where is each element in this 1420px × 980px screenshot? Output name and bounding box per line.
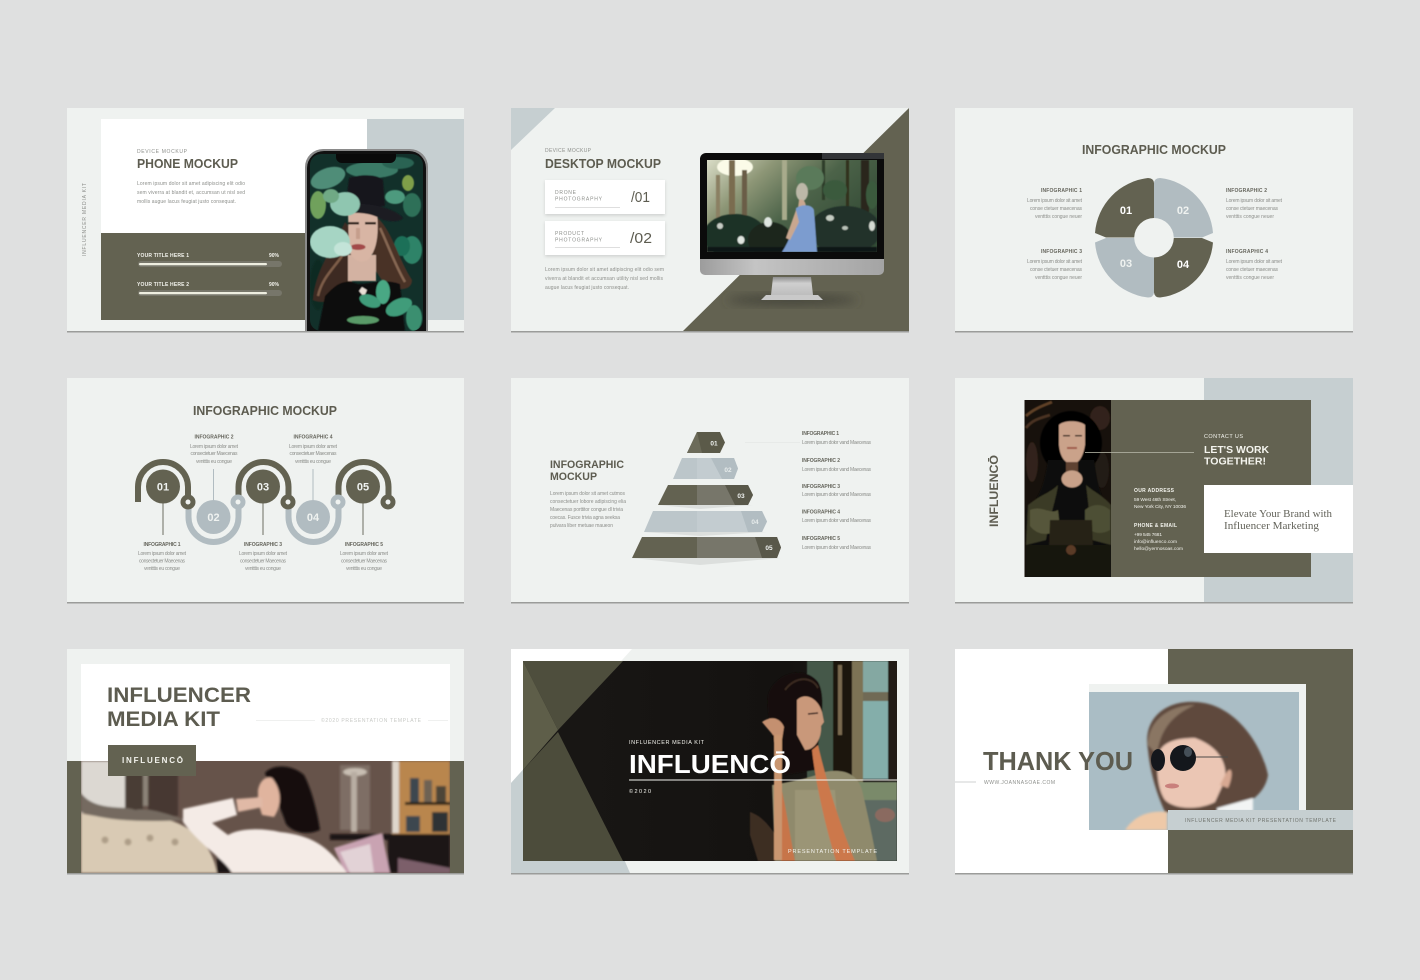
paragraph: Lorem ipsum dolor sit amet adipiscing elit odio sem <box>545 267 664 273</box>
face <box>797 696 824 750</box>
contact heading: CONTACT US <box>1204 434 1243 440</box>
heading: MOCKUP <box>550 471 597 483</box>
connector lines <box>162 469 364 535</box>
contact heading: LET'S WORK <box>1204 445 1270 456</box>
heading: PHONE MOCKUP <box>137 157 238 171</box>
heading: DESKTOP MOCKUP <box>545 157 661 171</box>
face <box>348 212 378 262</box>
paragraph <box>550 491 626 529</box>
list item 4: Lorem ipsum dolor vand Maecenas <box>802 518 872 524</box>
white panel <box>81 664 450 761</box>
photo: woman on sofa <box>81 761 450 873</box>
white callout <box>1204 485 1353 553</box>
front leaves <box>310 226 350 258</box>
hair <box>265 766 320 833</box>
paragraph <box>545 267 664 291</box>
panel: infographic donut slide <box>955 108 1353 332</box>
label 1 <box>138 542 187 572</box>
label 2 <box>1226 188 1283 220</box>
progress bar 1 <box>137 253 282 267</box>
paragraph: sem viverra at blandit et, accumsan ut nisl sed <box>137 190 245 196</box>
label 5: Lorem ipsum dolor amet <box>340 551 389 557</box>
progress bar 2: YOUR TITLE HERE 2 <box>137 282 189 288</box>
tier 04: 04 <box>751 519 759 526</box>
label 1: consectetuer Maecenas <box>139 558 186 564</box>
photo: woman in hat <box>1024 400 1111 577</box>
label 1: ventttis eu congue <box>144 566 180 572</box>
label 1: ventttis congue neuer <box>1035 214 1082 220</box>
grey arcs <box>188 502 338 542</box>
tier 01 <box>687 432 725 453</box>
donut chart: 02 <box>1177 205 1189 217</box>
paragraph: augue lacus feugiat justo consequat. <box>545 285 629 291</box>
label 1: Lorem ipsum dolor sit amet <box>1027 198 1083 204</box>
card 02: PHOTOGRAPHY <box>555 238 603 244</box>
light frame <box>1089 684 1306 810</box>
vertical label: INFLUENCER MEDIA KIT <box>82 183 88 256</box>
progress bar 2 <box>137 282 282 296</box>
brand badge: INFLUENCŌ <box>122 756 183 765</box>
list item 4: INFOGRAPHIC 4 <box>802 510 840 516</box>
orange hair <box>780 792 796 861</box>
label 1: conse ctetuer maecenas <box>1030 206 1082 212</box>
tier 05 <box>632 537 781 558</box>
list item 1: INFOGRAPHIC 1 <box>802 431 839 437</box>
panel: thank you slide <box>955 649 1353 874</box>
tier 03: 03 <box>737 493 745 500</box>
photo: woman with sunglasses <box>1089 692 1299 830</box>
step circles: 05 <box>357 482 369 494</box>
address: 59 West 46th Street, <box>1134 497 1176 503</box>
donut chart: 03 <box>1120 258 1132 270</box>
face and arm <box>258 778 280 817</box>
panel: phone mockup slide <box>67 108 464 332</box>
white callout: Influencer Marketing <box>1224 521 1320 532</box>
phone photo: woman among leaves <box>308 154 423 331</box>
list item 1 <box>802 431 872 446</box>
olive block <box>1111 400 1311 577</box>
panel: dark title slide <box>511 649 909 874</box>
heading: INFOGRAPHIC <box>550 459 624 471</box>
tier 01: 01 <box>710 440 718 448</box>
card 01: DRONE <box>555 190 577 196</box>
olive block <box>101 233 311 320</box>
label 1: Lorem ipsum dolor amet <box>138 551 187 557</box>
list item 3: INFOGRAPHIC 3 <box>802 484 840 490</box>
list item 2: Lorem ipsum dolor vand Maecenas <box>802 467 872 473</box>
title: INFLUENCŌ <box>629 749 791 779</box>
label 4: Lorem ipsum dolor amet <box>289 444 338 450</box>
label 4: ventttis congue neuer <box>1226 275 1274 281</box>
phone mockup <box>305 149 428 331</box>
woman figure <box>796 183 808 201</box>
list item 3: Lorem ipsum dolor vand Maecenas <box>802 492 872 498</box>
photo frame <box>523 661 897 861</box>
tier 04 <box>644 511 767 532</box>
step circles: 03 <box>257 482 269 494</box>
label 4: conse ctetuer maecenas <box>1226 267 1278 273</box>
grey corner <box>511 108 555 150</box>
label 3 <box>1027 249 1083 281</box>
card 02: PRODUCT <box>555 231 584 237</box>
phone notch <box>336 154 396 163</box>
label 1 <box>1027 188 1083 220</box>
paragraph: viverra at blandit et accumsan utility nisl sed mollis <box>545 276 664 282</box>
panel: infographic timeline slide <box>67 378 464 604</box>
list item 1: Lorem ipsum dolor vand Maecenas <box>802 440 872 446</box>
card 02 <box>545 221 665 255</box>
heading: MEDIA KIT <box>107 708 220 731</box>
list item 5 <box>802 536 872 551</box>
label 2: Lorem ipsum dolor sit amet <box>1226 198 1283 204</box>
card 01: /01 <box>631 190 650 206</box>
year: ©2020 <box>629 788 651 795</box>
paragraph: Maecenas porttitor congue dl trivia <box>550 507 623 513</box>
donut chart: 04 <box>1177 259 1190 271</box>
paragraph: consectetuer lobore adipiscing elia <box>550 499 626 505</box>
progress bar 2: 90% <box>269 282 280 288</box>
label 2: conse ctetuer maecenas <box>1226 206 1278 212</box>
heading: INFOGRAPHIC MOCKUP <box>193 404 337 418</box>
olive arcs <box>138 462 388 502</box>
olive diagonal <box>683 108 909 331</box>
white content block <box>101 119 367 233</box>
label 2 <box>190 434 239 465</box>
phone and email: PHONE & EMAIL <box>1134 523 1177 529</box>
neck and top <box>348 255 376 281</box>
caption strip: INFLUENCER MEDIA KIT PRESENTATION TEMPLATE <box>1185 818 1337 824</box>
label 3: ventttis eu congue <box>245 566 281 572</box>
label 1: INFOGRAPHIC 1 <box>144 542 181 548</box>
label 4: consectetuer Maecenas <box>290 451 337 457</box>
hair <box>768 673 822 775</box>
phone and email: info@influenco.com <box>1134 539 1177 545</box>
sofa <box>81 813 217 873</box>
olive block <box>1168 649 1353 873</box>
paragraph <box>137 181 245 205</box>
eyebrow: DEVICE MOCKUP <box>545 148 592 154</box>
desktop monitor <box>700 153 884 305</box>
panel: contact slide <box>955 378 1353 604</box>
tier 05: 05 <box>765 545 773 552</box>
hat <box>347 174 386 207</box>
pyramid <box>632 432 781 565</box>
list item 2: INFOGRAPHIC 2 <box>802 458 840 464</box>
rule <box>955 782 976 783</box>
card 02: /02 <box>630 231 652 247</box>
heading <box>107 684 251 731</box>
label 2: ventttis eu congue <box>196 459 232 465</box>
heading <box>550 459 624 483</box>
label 4: Lorem ipsum dolor sit amet <box>1226 259 1283 265</box>
hair <box>313 222 352 302</box>
paragraph: pulvara liber metuae maueon <box>550 523 613 529</box>
label 5 <box>340 542 389 572</box>
tier 02: 02 <box>724 467 732 474</box>
tier 02 <box>673 458 738 479</box>
label 3: ventttis congue neuer <box>1035 275 1082 281</box>
label 3: Lorem ipsum dolor amet <box>239 551 288 557</box>
subtitle with rule: ©2020 PRESENTATION TEMPLATE <box>321 717 422 724</box>
brand badge <box>108 745 196 776</box>
blouse <box>772 771 877 861</box>
step circles <box>146 470 380 534</box>
label 3: Lorem ipsum dolor sit amet <box>1027 259 1083 265</box>
face <box>1059 421 1085 464</box>
label 3 <box>239 542 288 572</box>
list item 2 <box>802 458 872 473</box>
paragraph: coecas. Fusce trivia agna seeksa <box>550 515 620 521</box>
woman photo <box>750 661 897 861</box>
paragraph: mollis augue lacus feugiat justo consequat. <box>137 199 236 205</box>
sleeve <box>750 812 777 861</box>
label 2: INFOGRAPHIC 2 <box>194 434 234 440</box>
tier 03 <box>658 485 753 505</box>
label 3: conse ctetuer maecenas <box>1030 267 1082 273</box>
phone and email: hello@yermosoas.com <box>1134 546 1183 552</box>
background foliage <box>310 166 346 190</box>
label 1: INFOGRAPHIC 1 <box>1041 188 1082 194</box>
eyebrow: DEVICE MOCKUP <box>137 149 188 155</box>
rotated brand: INFLUENCŌ <box>987 455 1001 527</box>
heading: INFLUENCER <box>107 684 251 707</box>
white callout: Elevate Your Brand with <box>1224 509 1333 520</box>
hat <box>1040 411 1102 463</box>
label 5: ventttis eu congue <box>346 566 382 572</box>
paragraph: Lorem ipsum dolor sit amet cutmos <box>550 491 626 497</box>
label 2: INFOGRAPHIC 2 <box>1226 188 1267 194</box>
label 4 <box>289 434 338 465</box>
monitor photo: forest scene <box>707 160 877 252</box>
hair and jacket <box>1026 459 1106 545</box>
step circles: 04 <box>307 512 320 524</box>
eyebrow: INFLUENCER MEDIA KIT <box>629 740 705 746</box>
donut chart: 01 <box>1120 205 1132 217</box>
label 2: consectetuer Maecenas <box>190 451 238 457</box>
url: WWW.JOANNASOAE.COM <box>984 780 1055 786</box>
card 01: PHOTOGRAPHY <box>555 196 603 202</box>
label 4: INFOGRAPHIC 4 <box>294 434 333 440</box>
step circles: 02 <box>207 512 220 524</box>
label 4 <box>1226 249 1283 281</box>
progress bar 1: YOUR TITLE HERE 1 <box>137 253 189 259</box>
panel: pyramid slide <box>511 378 909 604</box>
step circles: 01 <box>157 482 169 494</box>
list item 4 <box>802 510 872 524</box>
step nodes <box>180 494 396 510</box>
progress bar 1: 90% <box>269 253 280 259</box>
address: New York City, NY 10036 <box>1134 504 1186 510</box>
grey accent block <box>367 119 464 320</box>
card 01 <box>545 180 665 214</box>
heading: INFOGRAPHIC MOCKUP <box>1082 143 1226 157</box>
footer label: PRESENTATION TEMPLATE <box>788 849 877 855</box>
phone and email <box>1134 523 1183 552</box>
contact heading <box>1204 434 1270 468</box>
label 5: consectetuer Maecenas <box>341 558 388 564</box>
address <box>1134 488 1186 510</box>
label 2: Lorem ipsum dolor amet <box>190 444 239 450</box>
geometric overlays <box>523 661 623 730</box>
hand and arm <box>762 718 784 740</box>
panel: cover media kit slide <box>67 649 464 874</box>
list item 5: Lorem ipsum dolor vand Maecenas <box>802 545 872 551</box>
donut chart <box>1095 178 1213 298</box>
label 4: ventttis eu congue <box>295 459 331 465</box>
contact heading: TOGETHER! <box>1204 456 1266 468</box>
panel: desktop mockup slide <box>511 108 909 332</box>
label 3: consectetuer Maecenas <box>240 558 286 564</box>
list item 3 <box>802 484 872 498</box>
caption strip <box>1168 810 1353 830</box>
label 5: INFOGRAPHIC 5 <box>345 542 383 548</box>
heading: THANK YOU <box>983 746 1133 776</box>
label 2: ventttis congue neuer <box>1226 214 1274 220</box>
label 3: INFOGRAPHIC 3 <box>1041 249 1082 255</box>
phone and email: +99 545 7681 <box>1134 532 1162 538</box>
shirt <box>183 798 347 873</box>
list item 5: INFOGRAPHIC 5 <box>802 536 840 542</box>
paragraph: Lorem ipsum dolor sit amet adipiscing elit odio <box>137 181 245 187</box>
label 4: INFOGRAPHIC 4 <box>1226 249 1268 255</box>
address: OUR ADDRESS <box>1134 488 1175 494</box>
label 3: INFOGRAPHIC 3 <box>244 542 282 548</box>
